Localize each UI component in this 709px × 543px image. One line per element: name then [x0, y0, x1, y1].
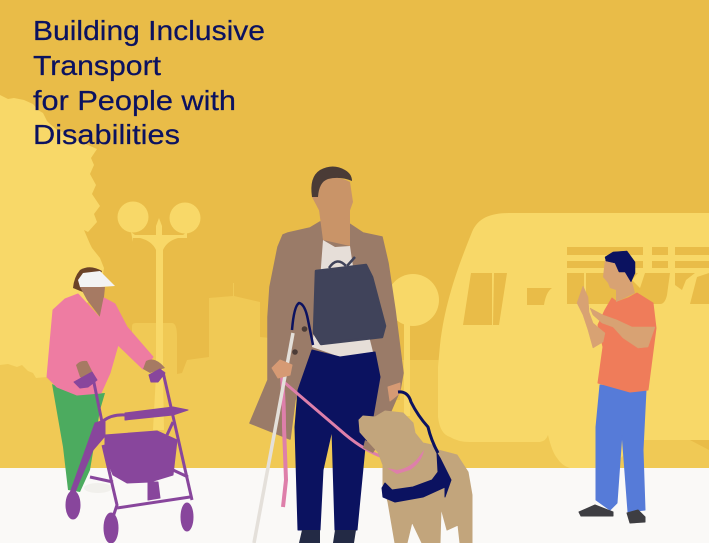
rollator: [66, 369, 193, 543]
shoes: [579, 505, 613, 516]
buttons: [302, 326, 307, 332]
background: city skyline: [0, 283, 709, 470]
background: tree: [0, 95, 104, 378]
person: woman with rollator: [47, 267, 193, 543]
white cane: [254, 333, 293, 543]
shirt: [312, 240, 373, 357]
background: round tree: [387, 274, 439, 416]
shoes: [299, 530, 320, 543]
title: Transport: [33, 50, 161, 81]
title: for People with: [33, 85, 236, 116]
cane strap: [292, 303, 313, 345]
train windows: [463, 247, 709, 450]
dog collar: [387, 450, 424, 474]
trousers: [295, 350, 380, 530]
dog harness: [382, 453, 451, 502]
hair: [311, 166, 352, 197]
person: man using sign language: [577, 251, 656, 523]
background: street lamp: [118, 202, 200, 430]
hands: [272, 360, 292, 378]
backpack: [314, 265, 385, 344]
title: Disabilities: [33, 119, 180, 150]
title: [33, 15, 265, 150]
guide dog: [363, 440, 377, 453]
coat: [250, 222, 403, 448]
arms: [577, 286, 605, 348]
pink leash: [285, 383, 380, 456]
person: woman with white cane and guide dog: [250, 166, 472, 543]
ground: [0, 468, 709, 543]
title: Building Inclusive: [33, 15, 265, 46]
visor: [78, 271, 115, 287]
background: train: [438, 213, 709, 468]
